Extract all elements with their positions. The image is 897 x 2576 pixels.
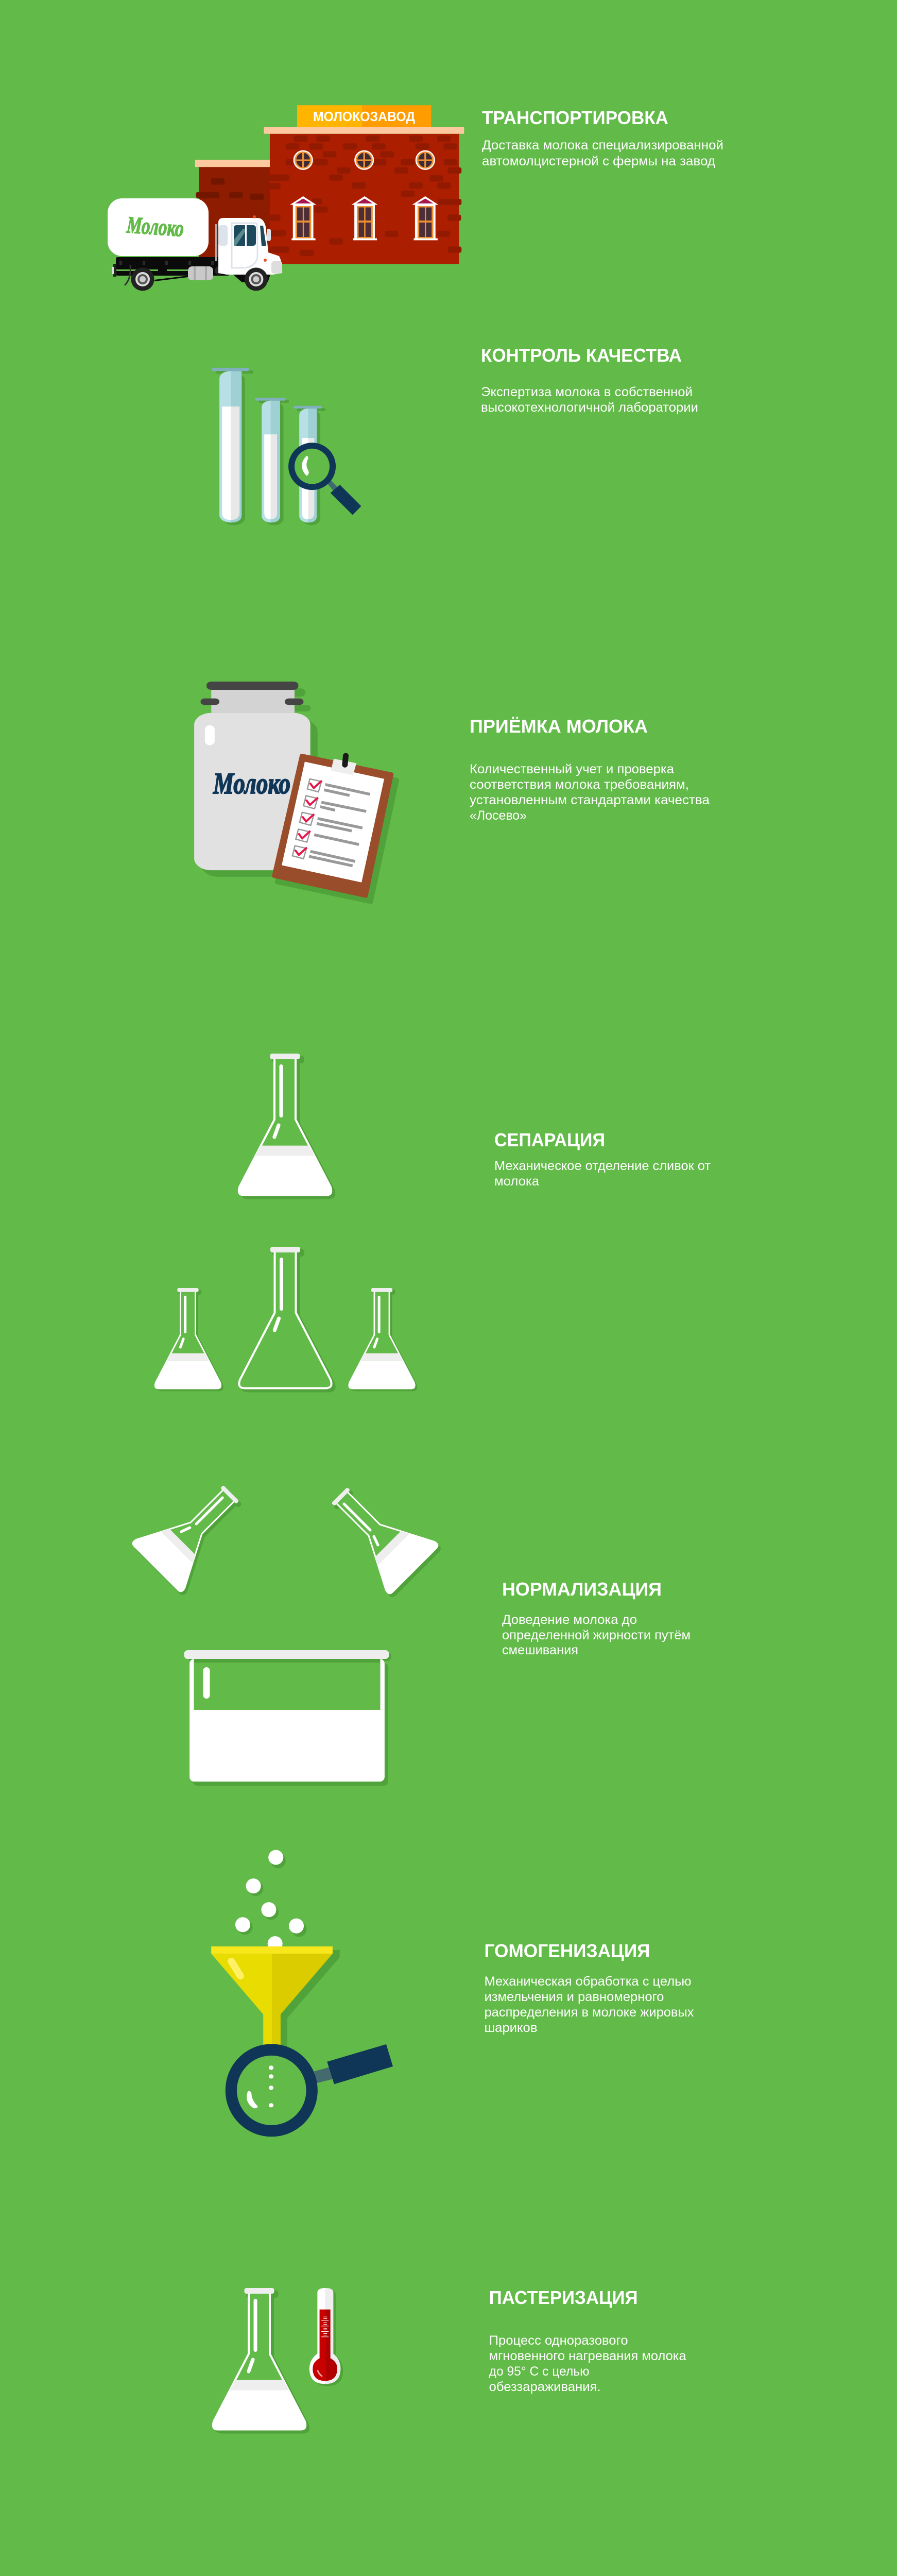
- description: [502, 1613, 691, 1657]
- description: Количественный учет и проверка: [470, 762, 674, 776]
- magnifier: [288, 443, 361, 515]
- panel: transportation step: [108, 105, 723, 291]
- tank: [108, 198, 209, 256]
- panel: separation step: [154, 1054, 711, 1391]
- round windows: [294, 150, 435, 170]
- description: соответствия молока требованиям,: [470, 777, 689, 792]
- description: [484, 1974, 694, 2035]
- heading: ТРАНСПОРТИРОВКА: [482, 107, 668, 128]
- description: распределения в молоке жировых: [484, 2005, 694, 2020]
- illustration: test tubes and magnifier: [212, 368, 361, 525]
- description: Механическая обработка с целью: [484, 1974, 691, 1989]
- illustration: milk can: [194, 682, 318, 877]
- illustration: tilted flask right: [314, 1470, 441, 1598]
- description: мгновенного нагревания молока: [489, 2349, 686, 2363]
- heading: НОРМАЛИЗАЦИЯ: [502, 1579, 662, 1600]
- heading: КОНТРОЛЬ КАЧЕСТВА: [481, 345, 682, 366]
- description: шариков: [484, 2021, 538, 2035]
- description: автомолцистерной с фермы на завод: [482, 154, 715, 168]
- illustration: thermometer: [309, 2288, 343, 2386]
- description: Доведение молока до: [502, 1613, 637, 1627]
- description: Механическое отделение сливок от: [494, 1159, 711, 1173]
- description: [494, 1159, 711, 1189]
- illustration: tilted flask left: [131, 1468, 258, 1596]
- panel: quality control step: [212, 345, 698, 525]
- heading: ГОМОГЕНИЗАЦИЯ: [484, 1940, 650, 1961]
- illustration: clipboard checklist: [274, 756, 397, 902]
- magnifier lens: [226, 2044, 318, 2137]
- panel: normalization step: [131, 1468, 691, 1786]
- description: [481, 385, 698, 415]
- checkmarks: [292, 779, 322, 859]
- illustration: separated flasks: [154, 1247, 417, 1391]
- panel: homogenization step: [211, 1850, 694, 2137]
- illustration: milk factory: [195, 105, 464, 265]
- funnel: [211, 1946, 340, 2048]
- heading: ПАСТЕРИЗАЦИЯ: [489, 2287, 638, 2308]
- description: до 95° С с целью: [489, 2364, 590, 2379]
- description: [482, 138, 723, 168]
- middle tube: [255, 398, 286, 522]
- tall tube: [212, 368, 249, 522]
- description: высокотехнологичной лаборатории: [481, 400, 698, 415]
- description: «Лосево»: [470, 808, 527, 823]
- description: [489, 2333, 686, 2394]
- illustration: beaker with milk: [184, 1650, 391, 1786]
- description: установленным стандартами качества: [470, 793, 710, 807]
- fat globules: [235, 1850, 306, 1951]
- description: обеззараживания.: [489, 2380, 601, 2394]
- magnifier handle: [314, 2044, 393, 2084]
- factory sign: [297, 105, 431, 127]
- description: Экспертиза молока в собственной: [481, 385, 693, 399]
- factory sign text: МОЛОКОЗАВОД: [313, 109, 415, 124]
- description: определенной жирности путём: [502, 1628, 691, 1642]
- description: Доставка молока специализированной: [482, 138, 723, 152]
- can label: Молоко: [213, 767, 290, 800]
- illustration: full flask: [238, 1054, 334, 1198]
- description: [470, 762, 710, 823]
- tall windows: [290, 196, 439, 240]
- tube shadows: [216, 370, 325, 525]
- illustration: milk truck: [108, 198, 282, 291]
- panel: milk reception step: [194, 682, 710, 902]
- heading: СЕПАРАЦИЯ: [494, 1129, 605, 1150]
- short tube: [294, 406, 322, 522]
- description: молока: [494, 1174, 539, 1189]
- description: измельчения и равномерного: [484, 1990, 664, 2004]
- tank label: Молоко: [126, 211, 185, 242]
- illustration: funnel and magnifier: [211, 1850, 393, 2137]
- illustration: flask: [212, 2288, 308, 2433]
- heading: ПРИЁМКА МОЛОКА: [470, 716, 648, 737]
- description: Процесс одноразового: [489, 2333, 628, 2348]
- panel: pasteurization step: [212, 2287, 686, 2433]
- description: смешивания: [502, 1643, 578, 1657]
